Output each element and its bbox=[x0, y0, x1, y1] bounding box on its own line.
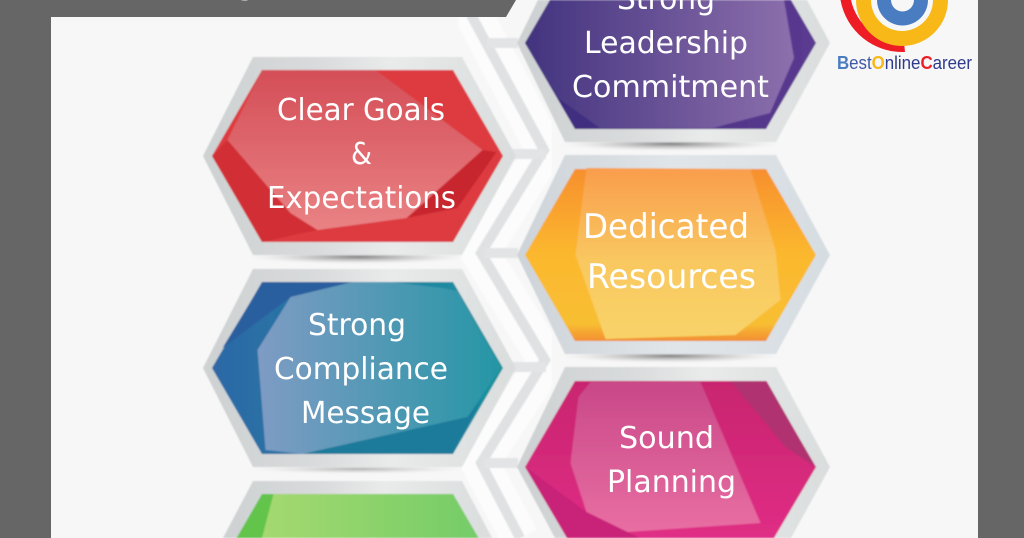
label: strong leadership commitment: Commitment bbox=[572, 70, 769, 105]
label: clear goals and expectations: Clear Goals bbox=[277, 93, 445, 128]
label: strong compliance message: Compliance bbox=[274, 352, 448, 387]
icon: logo rings bbox=[840, 0, 948, 52]
connector chevrons between hexagons bbox=[463, 0, 547, 538]
header tab bbox=[0, 0, 516, 17]
hexagon: green partial bbox=[223, 481, 492, 538]
hexagon: dedicated resources bbox=[517, 155, 830, 363]
label: strong compliance message: Message bbox=[301, 396, 430, 431]
label: strong leadership commitment bbox=[572, 0, 769, 105]
label: sound planning bbox=[607, 421, 736, 500]
label: sound planning: Sound bbox=[619, 421, 714, 456]
hexagon: strong compliance message bbox=[203, 269, 516, 474]
logo wordmark: BestOnlineCareer bbox=[837, 53, 972, 73]
label: strong leadership commitment: Leadership bbox=[584, 26, 748, 61]
label: strong compliance message bbox=[274, 308, 448, 431]
label: clear goals and expectations: & bbox=[351, 137, 372, 172]
label: dedicated resources: Resources bbox=[587, 257, 756, 297]
label: clear goals and expectations bbox=[267, 93, 456, 216]
label: clear goals and expectations: Expectations bbox=[267, 181, 456, 216]
logo: BestOnlineCareer bbox=[837, 0, 972, 73]
label: dedicated resources bbox=[583, 207, 756, 297]
label: strong compliance message: Strong bbox=[308, 308, 406, 343]
label: dedicated resources: Dedicated bbox=[583, 207, 749, 247]
hexagon: clear goals and expectations bbox=[203, 57, 516, 264]
label: sound planning: Planning bbox=[607, 465, 736, 500]
hexagon: sound planning bbox=[517, 367, 830, 538]
hexagon: strong leadership commitment bbox=[517, 0, 830, 151]
